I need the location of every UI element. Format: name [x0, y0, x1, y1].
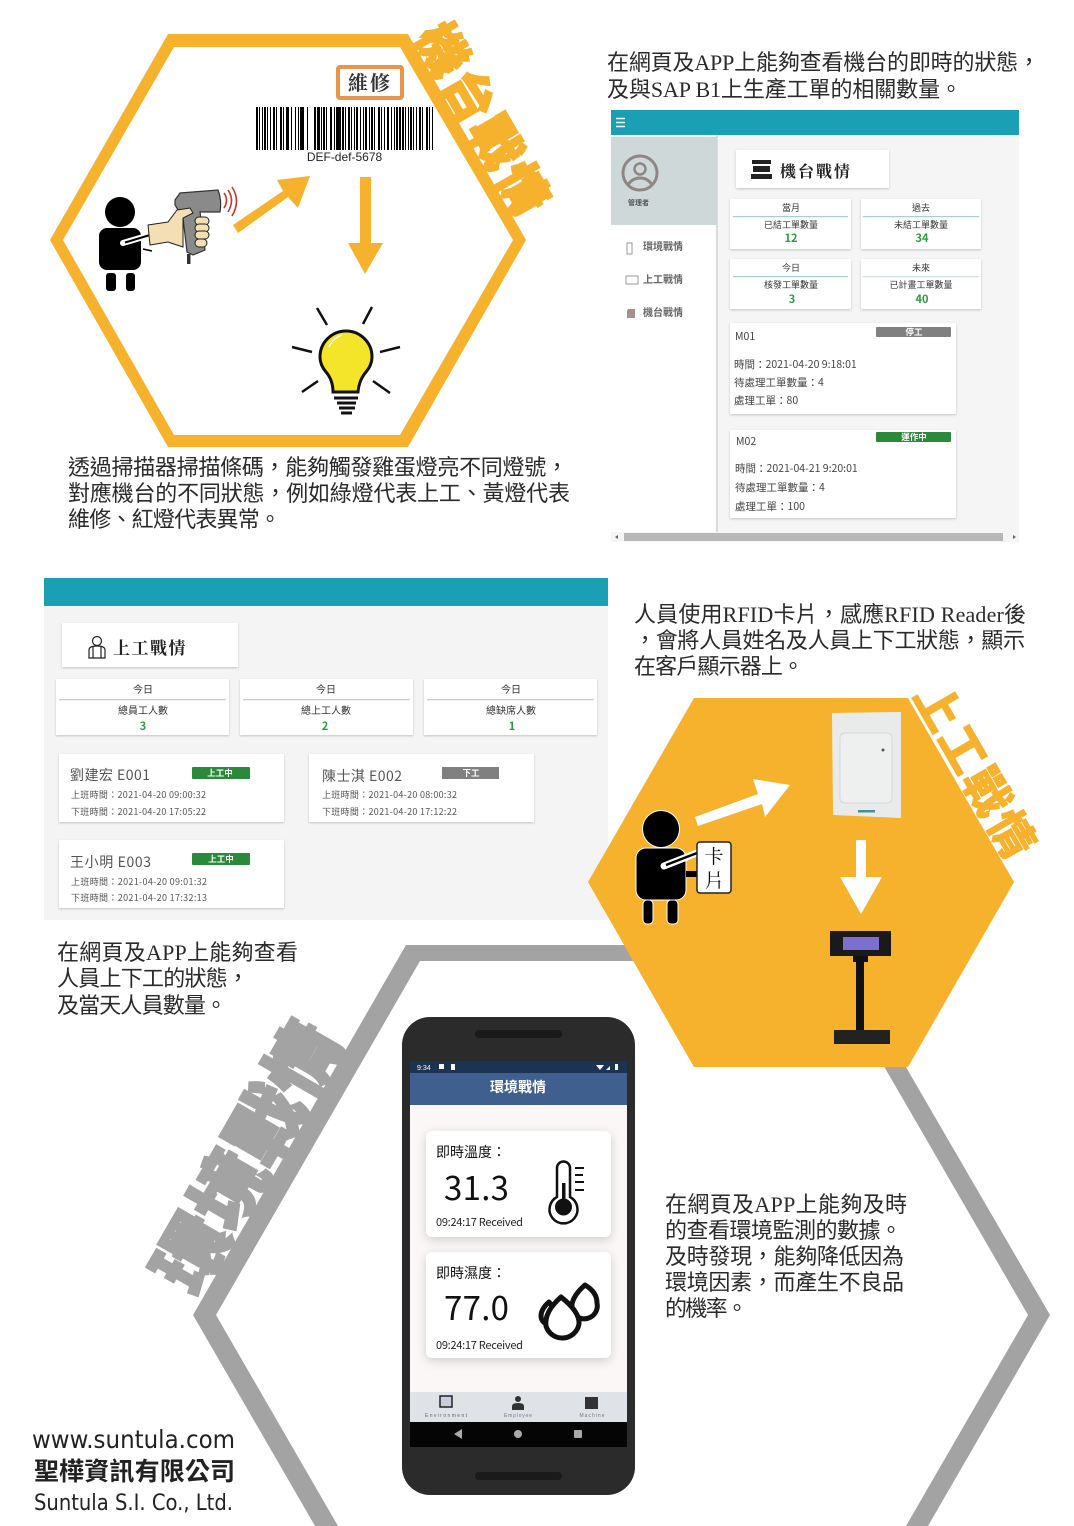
stat: past open orders [861, 199, 981, 249]
card: humidity [426, 1252, 611, 1358]
arrow: reader to display [840, 840, 882, 914]
card: machine M01: 停工 [905, 326, 923, 338]
company logo text: Suntula S.I. Co., Ltd. [34, 1491, 233, 1516]
card: E003: 王小明 E003 [70, 852, 151, 872]
gray hexagon frame [193, 945, 1050, 1526]
sidebar: 上工戰情 [643, 271, 683, 286]
card: E001: 劉建宏 E001 [70, 765, 150, 785]
stat: past open orders: 過去 [912, 201, 930, 214]
text: attendance description left: 及當天人員數量。 [57, 993, 227, 1018]
app header: 環境戰情 [490, 1077, 546, 1097]
lower speaker [475, 1472, 562, 1480]
text: attendance description left: 人員上下工的狀態， [57, 966, 249, 991]
card: machine M01: 處理工單：80 [734, 393, 798, 408]
icon: RFID reader [832, 712, 901, 818]
stat: today issued orders: 今日 [782, 261, 800, 274]
barcode: DEF-def-5678 [307, 150, 383, 164]
text: attendance description left: 在網頁及APP上能夠查看 [57, 940, 298, 965]
text: RFID description [634, 602, 1026, 679]
arrow: card to reader [695, 779, 790, 826]
card: E003 [59, 840, 284, 908]
text: web and app machine status: 在網頁及APP上能夠查看機台的即時的狀態， [607, 50, 1040, 75]
stat: month closed orders [730, 199, 851, 249]
text: RFID description: 在客戶顯示器上。 [634, 654, 804, 679]
text: environment description: 的機率。 [665, 1296, 748, 1321]
card: machine M01: 時間：2021-04-20 9:18:01 [734, 357, 857, 372]
icon: person with card: 卡 [704, 842, 724, 869]
stat: absent staff: 總缺席人數 [486, 702, 536, 717]
stat: total staff: 3 [140, 718, 146, 734]
stat: absent staff [424, 679, 597, 735]
app content background [410, 1105, 627, 1392]
stat: today issued orders [730, 259, 851, 309]
card: E001: 上工中 [207, 767, 233, 779]
stat: past open orders: 未結工單數量 [894, 218, 948, 231]
scrollbar [611, 532, 1019, 542]
bottom navigation [410, 1392, 627, 1422]
icon: light bulb [292, 307, 400, 413]
stat: working staff: 總上工人數 [301, 702, 351, 717]
icon: thermometer [549, 1162, 584, 1223]
stat: total staff: 今日 [133, 681, 153, 696]
text: environment description: 及時發現，能夠降低因為 [665, 1244, 904, 1269]
card: E001: 下班時間：2021-04-20 17:05:22 [71, 805, 206, 818]
card: humidity: 即時濕度： [436, 1263, 506, 1283]
title: machine status: 機台戰情 [402, 9, 569, 226]
text: web and app machine status: 及與SAP B1上生產工單的相關數量。 [607, 77, 962, 102]
status bar [410, 1061, 627, 1073]
heading card [736, 150, 889, 188]
orange hexagon [588, 698, 1014, 1067]
text: RFID description: 人員使用RFID卡片，感應RFID Reader後 [634, 602, 1026, 627]
text: machine status description: 維修、紅燈代表異常。 [68, 507, 281, 532]
card: E002: 下工 [462, 767, 480, 779]
text: machine status description: 對應機台的不同狀態，例如綠燈代表上工、黃燈代表 [68, 481, 570, 506]
speaker [475, 1030, 562, 1038]
card: E002 [309, 754, 534, 822]
heading card: 機台戰情 [780, 159, 852, 182]
text: environment description: 環境因素，而產生不良品 [665, 1270, 904, 1295]
card: machine M02: M02 [736, 434, 756, 449]
icon: person with card: 片 [704, 866, 724, 893]
heading card: 上工戰情 [113, 634, 187, 659]
top bar [611, 110, 1019, 135]
menu icon [616, 118, 625, 126]
company logo text: www.suntula.com [32, 1425, 235, 1454]
stat: today issued orders: 3 [789, 291, 795, 307]
sidebar: 管理者 [628, 198, 649, 208]
card: E003: 下班時間：2021-04-20 17:32:13 [71, 891, 207, 904]
panel: machine dashboard [611, 110, 1019, 542]
sidebar: 環境戰情 [643, 238, 683, 253]
text: RFID description: ，會將人員姓名及人員上下工狀態，顯示 [634, 628, 1025, 653]
text: environment description: 在網頁及APP上能夠及時 [665, 1192, 907, 1217]
card: machine M02 [730, 430, 956, 518]
icon: person with card [636, 810, 731, 924]
sidebar [611, 135, 718, 532]
title: attendance status: 上工戰情 [900, 670, 1054, 869]
company logo text: 聖樺資訊有限公司 [34, 1452, 235, 1488]
card: E003: 上班時間：2021-04-20 09:01:32 [71, 875, 207, 888]
card: machine M01 [730, 323, 956, 414]
sidebar: 機台戰情 [643, 304, 683, 319]
panel: phone [402, 1017, 635, 1495]
stat: total staff [56, 679, 229, 735]
card: humidity: 09:24:17 Received [436, 1337, 523, 1353]
stat: month closed orders: 12 [785, 230, 797, 246]
icon: water drops [541, 1285, 597, 1338]
card: E001: 上班時間：2021-04-20 09:00:32 [71, 788, 206, 801]
card: E001 [59, 754, 284, 822]
orange hexagon frame [50, 34, 526, 447]
card: temperature: 09:24:17 Received [436, 1214, 523, 1230]
stat: absent staff: 今日 [501, 681, 521, 696]
stat: future planned orders: 未來 [912, 261, 930, 274]
text: machine status description [68, 455, 570, 532]
card: machine M02: 處理工單：100 [735, 499, 805, 514]
status bar: 9:34 [417, 1065, 431, 1072]
card: machine M02: 運作中 [901, 431, 927, 443]
stat: total staff: 總員工人數 [118, 702, 168, 717]
icon: person with scanner [99, 187, 236, 291]
card: temperature: 即時溫度： [436, 1142, 506, 1162]
phone body [402, 1017, 635, 1495]
app header [410, 1073, 627, 1105]
stat: today issued orders: 核發工單數量 [764, 278, 818, 291]
text: environment description: 的查看環境監測的數據。 [665, 1218, 902, 1243]
stat: future planned orders: 已計畫工單數量 [889, 278, 953, 291]
stat: month closed orders: 已結工單數量 [764, 218, 818, 231]
android navigation bar [410, 1422, 627, 1447]
card: machine M01: 待處理工單數量：4 [734, 375, 824, 390]
company logo text [32, 1425, 235, 1516]
stat: future planned orders [861, 259, 981, 309]
title: environment status: 環境戰情 [123, 1000, 364, 1310]
arrow: scanner to barcode [233, 176, 310, 233]
card: humidity: 77.0 [444, 1282, 509, 1330]
bottom navigation: Employee [504, 1413, 532, 1419]
maintenance label: 維修 [348, 67, 392, 96]
stat: working staff: 2 [322, 718, 328, 734]
stat: future planned orders: 40 [916, 291, 928, 307]
stat: working staff [240, 679, 413, 735]
bottom navigation: Environment [425, 1413, 468, 1419]
card: machine M01: M01 [735, 329, 755, 344]
stat: past open orders: 34 [916, 230, 929, 246]
text: environment description [665, 1192, 907, 1321]
stat: working staff: 今日 [316, 681, 336, 696]
bottom navigation: Machine [580, 1413, 605, 1419]
panel: attendance dashboard [44, 578, 608, 920]
stat: month closed orders: 當月 [782, 201, 800, 214]
panel: machine status [50, 8, 569, 447]
panel: attendance status hexagon [588, 670, 1054, 1067]
card: E002: 上班時間：2021-04-20 08:00:32 [322, 788, 457, 801]
card: E003: 上工中 [208, 853, 234, 865]
card: temperature: 31.3 [444, 1162, 509, 1210]
card: E002: 陳士淇 E002 [322, 766, 402, 786]
text: web and app machine status [607, 50, 1040, 102]
card: machine M02: 待處理工單數量：4 [735, 480, 825, 495]
arrow: barcode to light [348, 177, 383, 274]
text: machine status description: 透過掃描器掃描條碼，能夠觸發雞蛋燈亮不同燈號， [68, 455, 568, 480]
card: E002: 下班時間：2021-04-20 17:12:22 [322, 805, 457, 818]
top bar [44, 578, 608, 606]
heading card [62, 623, 238, 667]
icon: customer display [830, 931, 891, 1044]
card: temperature [426, 1131, 611, 1237]
text: attendance description left [57, 940, 298, 1018]
stat: absent staff: 1 [509, 718, 515, 734]
maintenance label [338, 67, 402, 98]
card: machine M02: 時間：2021-04-21 9:20:01 [735, 461, 858, 476]
